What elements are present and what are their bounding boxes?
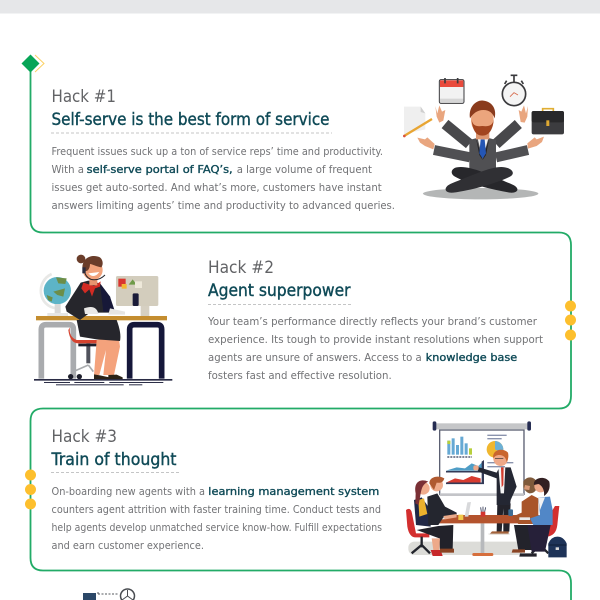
hack 2 body text: knowledge base xyxy=(426,351,517,364)
hack 1 label: Hack #1 xyxy=(52,87,116,106)
illustration: support agent at desk xyxy=(34,255,172,385)
area charts on board xyxy=(446,460,484,483)
icon: calendar xyxy=(439,78,464,103)
illustration: meditating multitasking man xyxy=(403,75,564,199)
illustration: next section partial icons xyxy=(83,589,134,600)
hack 1 body text: self-serve portal of FAQ’s, xyxy=(87,163,233,176)
top grey band xyxy=(0,0,600,14)
hack 1 body text: issues get auto-sorted. And what’s more, customers have instant xyxy=(52,181,382,194)
right attendees xyxy=(508,477,559,557)
hack 2 label: Hack #2 xyxy=(208,258,274,277)
yellow dots right xyxy=(565,300,576,340)
panel: hack 1 xyxy=(51,87,395,212)
floor lines xyxy=(34,379,172,385)
hack 1 body text: answers limiting agents’ time and productivity to advanced queries. xyxy=(52,199,395,212)
icon: backpack xyxy=(548,537,567,557)
desk xyxy=(36,316,167,379)
hack 2 body text: Your team’s performance directly reflects your brand’s customer xyxy=(207,315,537,328)
hack 3 body text: learning management system xyxy=(208,485,379,498)
hack 1 body text xyxy=(52,145,395,212)
bar chart on board xyxy=(447,437,472,457)
hack 3 body text: On-boarding new agents with a xyxy=(52,485,205,498)
icon: stopwatch xyxy=(502,75,526,106)
hack 3 body text xyxy=(52,485,382,552)
hack 3 body text: and earn customer experience. xyxy=(52,539,204,552)
hack 2 body text xyxy=(207,315,544,382)
presenter xyxy=(473,450,517,534)
hack 3 heading: Train of thought xyxy=(51,450,177,469)
panel: hack 3 xyxy=(51,427,382,552)
hack 1 heading: Self-serve is the best form of service xyxy=(52,110,330,129)
icon: globe xyxy=(41,274,71,316)
left attendees xyxy=(406,477,457,556)
illustration: team meeting with presenter xyxy=(406,421,567,557)
icon: briefcase xyxy=(532,109,564,134)
icon: monitor xyxy=(116,276,158,316)
hack 2 heading: Agent superpower xyxy=(208,281,351,300)
presentation board xyxy=(433,421,531,496)
yellow dots left xyxy=(25,470,36,510)
hack 1 body text: Frequent issues suck up a ton of service reps’ time and productivity. xyxy=(52,145,383,158)
hack 3 body text: help agents develop unmatched service know-how. Fulfill expectations xyxy=(52,521,382,534)
icon: paper and pencil xyxy=(403,107,432,137)
table xyxy=(424,502,541,556)
hack 3 label: Hack #3 xyxy=(52,427,117,446)
pie chart on board xyxy=(487,435,513,467)
hack 2 body text: agents are unsure of answers. Access to a xyxy=(208,351,422,364)
panel: hack 2 xyxy=(207,258,544,382)
hack 1 body text: a large volume of frequent xyxy=(237,163,373,176)
start marker diamond xyxy=(22,54,44,72)
hack 2 body text: experience. Its tough to provide instant resolutions when support xyxy=(208,333,544,346)
hack 1 body text: With a xyxy=(52,163,84,176)
hack 2 body text: fosters fast and effective resolution. xyxy=(208,369,392,382)
hack 3 body text: counters agent attrition with faster training time. Conduct tests and xyxy=(52,503,381,516)
agent figure xyxy=(65,255,125,379)
